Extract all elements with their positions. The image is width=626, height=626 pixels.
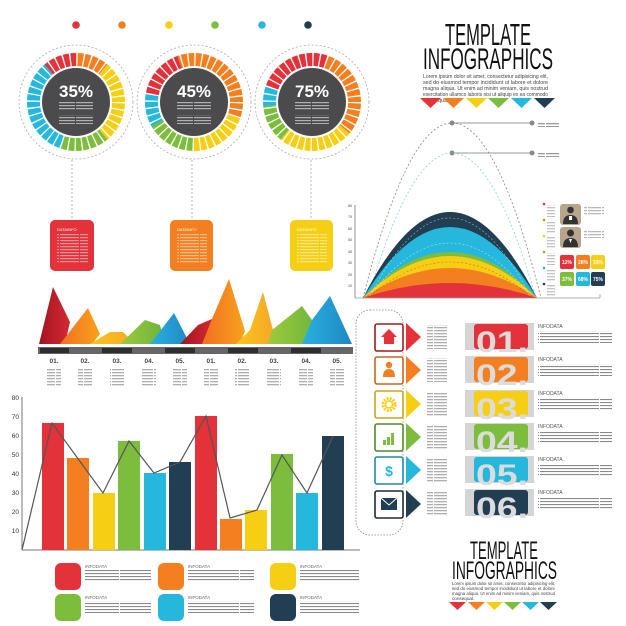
timeline strip and labels: 04. — [301, 358, 311, 365]
numbered list — [465, 323, 534, 525]
title top: TEMPLATE — [445, 17, 531, 52]
data box red: DATAINFO — [57, 227, 77, 232]
bar chart: 30 — [12, 490, 19, 497]
bar chart: 70 — [12, 414, 19, 421]
bar chart: 20 — [12, 509, 19, 516]
timeline strip and labels: 04. — [144, 358, 154, 365]
legend infodata: INFODATA — [85, 595, 107, 600]
numbered list: 02. — [476, 359, 528, 392]
timeline strip and labels: 02. — [237, 358, 247, 365]
bell chart: 70 — [348, 215, 352, 219]
percentage tiles: 68% — [578, 277, 589, 283]
gauge 45%: 45% — [177, 82, 211, 101]
steps panel — [356, 310, 447, 535]
title bottom: magna aliqua. Ut enim ad minim veniam, quis nostrud — [452, 591, 555, 596]
percentage tiles: 28% — [578, 260, 589, 266]
data box orange — [170, 220, 213, 271]
title top: Lorem ipsum dolor sit amet, consectetur adipisicing elit, — [423, 74, 548, 80]
numbered list: 01. — [476, 326, 528, 359]
data box red — [50, 220, 94, 271]
gauge 75% — [252, 42, 372, 162]
legend infodata: INFODATA — [188, 564, 210, 569]
infodata texts: INFODATA — [538, 357, 563, 363]
step 5 dollar: $ — [385, 463, 393, 479]
title bottom: Lorem ipsum dolor sit amet, consectetur adipisicing elit, — [452, 581, 555, 586]
timeline strip and labels: 05. — [332, 358, 342, 365]
percentage tiles — [560, 255, 605, 286]
percentage tiles: 12% — [562, 260, 573, 266]
title top: magna aliqua. Ut enim ad minim veniam, quis nostrud — [423, 86, 548, 92]
legend infodata — [55, 563, 360, 621]
step 3 gear — [375, 390, 421, 418]
numbered list: 03. — [476, 393, 528, 426]
title top: exercitation ullamco laboris nisi ut aliquip ex ea commodo — [423, 92, 548, 98]
legend infodata: INFODATA — [188, 595, 210, 600]
numbered list: 04. — [476, 426, 528, 459]
infodata texts — [538, 324, 612, 509]
percentage tiles: 75% — [593, 277, 604, 283]
percentage tiles: 33% — [593, 260, 604, 266]
legend infodata: INFODATA — [300, 595, 322, 600]
bar chart: 50 — [12, 452, 19, 459]
infodata texts: INFODATA — [538, 391, 563, 397]
timeline strip and labels: 03. — [112, 358, 122, 365]
timeline strip and labels: 05. — [175, 358, 185, 365]
infodata texts: INFODATA — [538, 490, 563, 496]
data box orange: DATAINFO — [177, 227, 197, 232]
data box yellow: DATAINFO — [297, 227, 317, 232]
bell chart — [348, 120, 600, 298]
data box yellow — [290, 220, 333, 271]
legend infodata: INFODATA — [300, 564, 322, 569]
bar chart: 80 — [12, 395, 19, 402]
color dots row — [72, 21, 312, 29]
bar chart: 40 — [12, 471, 19, 478]
title top — [420, 17, 555, 108]
timeline strip and labels: 01. — [206, 358, 216, 365]
numbered list: 05. — [476, 459, 528, 492]
title top: consequat. — [423, 98, 451, 104]
bell chart: 50 — [348, 238, 352, 242]
bell chart: 80 — [348, 204, 352, 208]
infodata texts: INFODATA — [538, 424, 563, 430]
numbered list: 06. — [476, 492, 528, 525]
mountain chart — [39, 279, 352, 344]
timeline strip and labels: 02. — [80, 358, 90, 365]
step 6 mail — [375, 490, 421, 518]
timeline strip and labels: 03. — [269, 358, 279, 365]
title bottom — [449, 537, 557, 610]
bell chart: 10 — [348, 284, 352, 288]
gauge 75%: 75% — [295, 82, 329, 101]
bell chart: 60 — [348, 227, 352, 231]
bell chart: 40 — [348, 250, 352, 254]
infodata texts: INFODATA — [538, 324, 563, 330]
connector lines — [72, 160, 311, 220]
title top: sed do eiusmod tempor incididunt ut labore et dolore — [423, 80, 548, 86]
step 1 home — [375, 323, 421, 351]
step 2 person — [375, 356, 421, 384]
bar chart: 10 — [12, 528, 19, 535]
step 4 chart — [375, 423, 421, 451]
person icons — [560, 204, 604, 248]
bell chart: 20 — [348, 273, 352, 277]
timeline strip and labels: 01. — [49, 358, 59, 365]
gauge 35%: 35% — [59, 82, 93, 101]
title bottom: TEMPLATE — [470, 537, 538, 565]
bell legend — [543, 203, 555, 297]
gauge 35% — [16, 42, 136, 162]
gauge 45% — [136, 44, 252, 160]
bar chart — [12, 395, 360, 550]
step 5 dollar — [375, 456, 421, 484]
timeline strip and labels — [38, 347, 353, 386]
title bottom: consequat. — [452, 596, 474, 601]
title bottom: sed do eiusmod tempor incididunt ut labore et dolore — [452, 586, 555, 591]
bar chart: 60 — [12, 433, 19, 440]
legend infodata: INFODATA — [85, 564, 107, 569]
infodata texts: INFODATA — [538, 457, 563, 463]
percentage tiles: 37% — [562, 277, 573, 283]
bell chart: 30 — [348, 261, 352, 265]
